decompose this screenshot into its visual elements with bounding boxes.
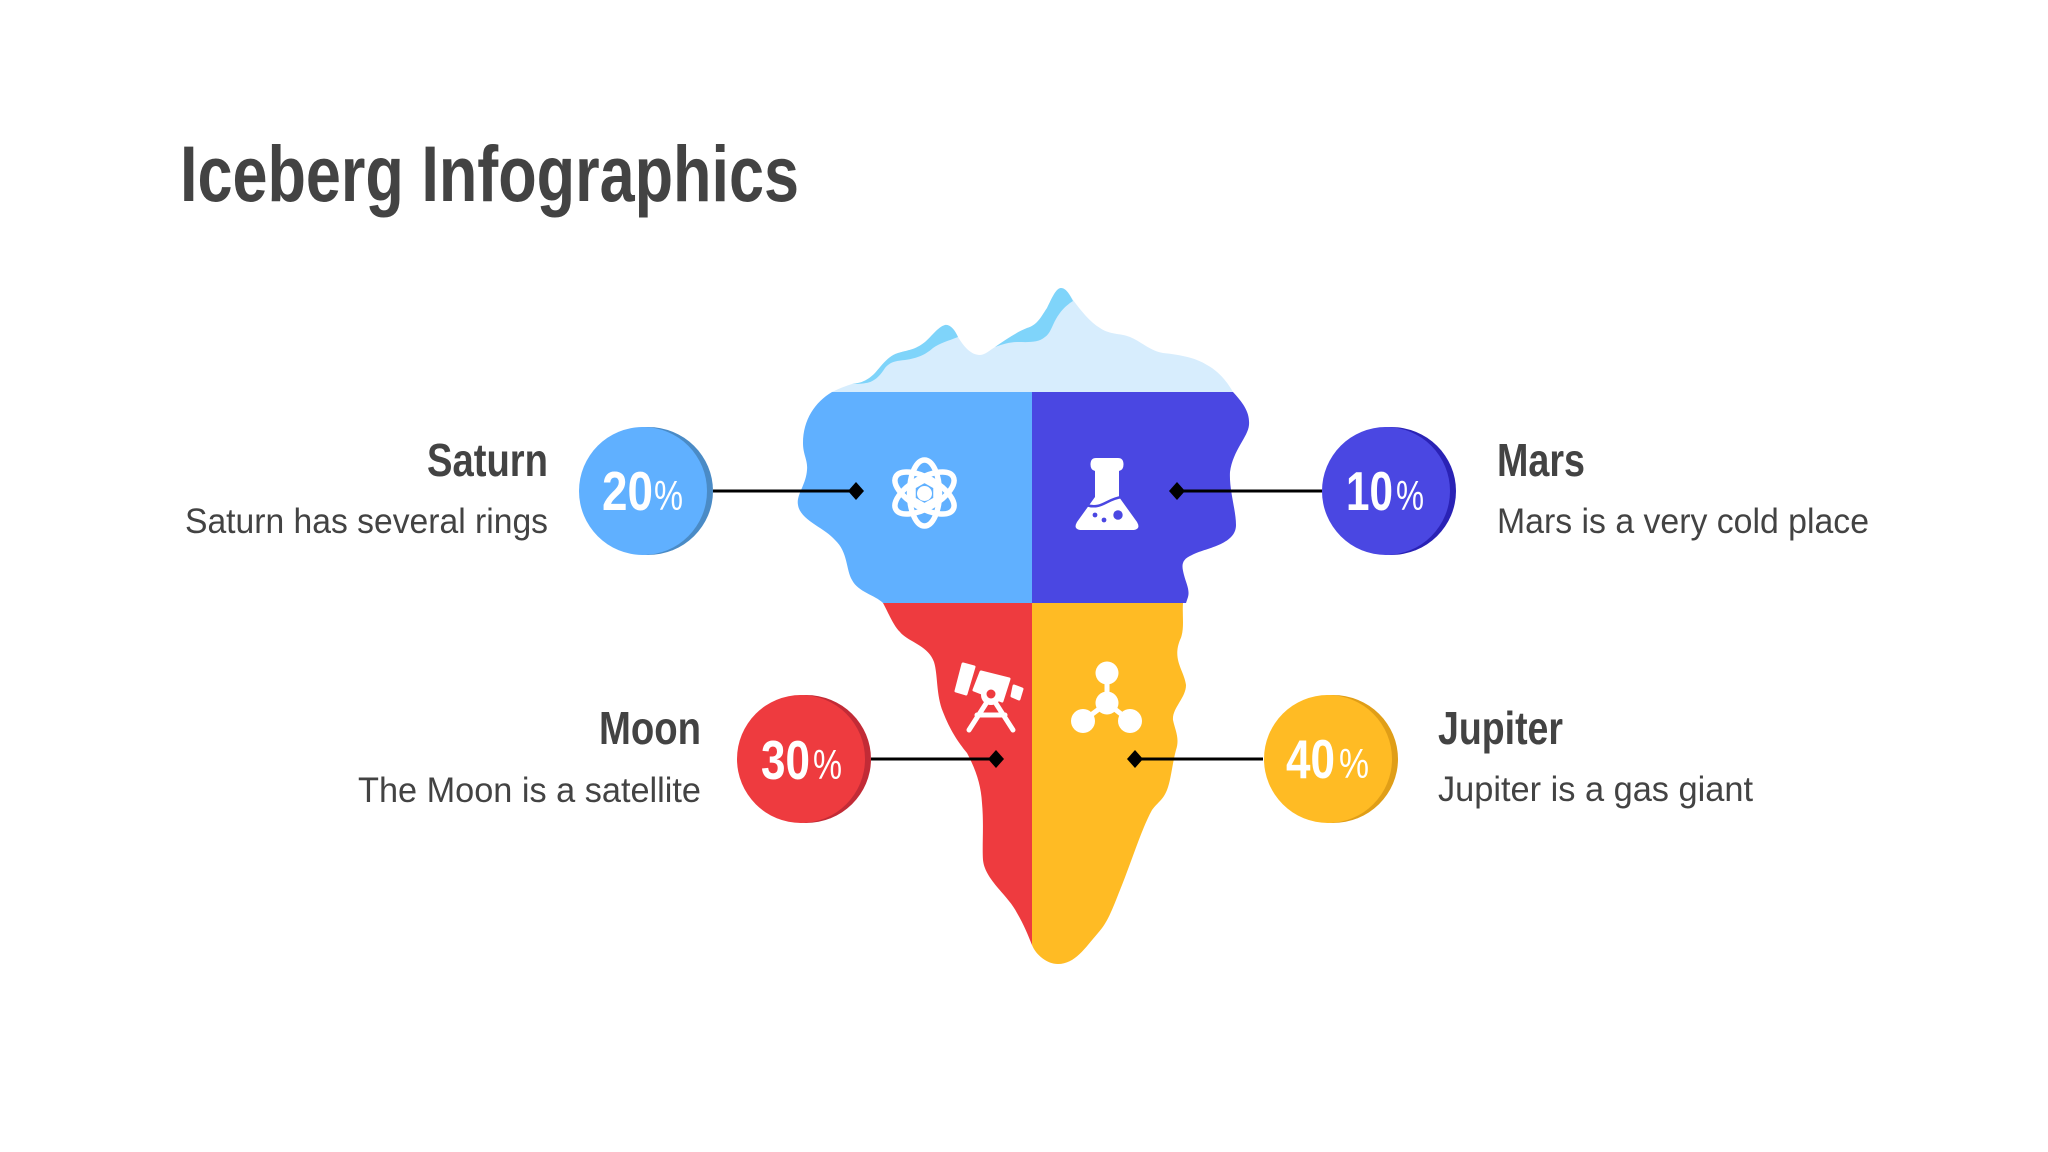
badge: Saturn 20%: 20 (602, 460, 653, 522)
text block: Jupiter: Jupiter is a gas giant (1438, 770, 1753, 809)
connector: Jupiter (1127, 750, 1263, 768)
badge: Mars 10%: % (1396, 472, 1424, 519)
segment: Mars (1032, 392, 1249, 603)
badge: Moon 30%: 30 (761, 729, 810, 791)
icon: atom (888, 460, 961, 526)
text block: Jupiter (1438, 702, 1753, 809)
text block: Saturn: Saturn (427, 434, 548, 486)
connector: Saturn (713, 482, 864, 500)
badge: Saturn 20%: % (654, 472, 683, 519)
text block: Mars (1497, 434, 1869, 541)
badge: Jupiter 40%: 40 (1286, 728, 1335, 790)
title: Iceberg Infographics (180, 129, 799, 218)
connector: Mars (1169, 482, 1322, 500)
icon: telescope (956, 664, 1022, 730)
text block: Saturn (185, 434, 548, 541)
segment: Jupiter (1032, 603, 1186, 964)
iceberg tip (832, 288, 1233, 392)
text block: Moon (358, 702, 701, 810)
snow shading right (995, 288, 1073, 347)
badge: Moon 30%: % (813, 741, 842, 788)
text block: Moon: Moon (599, 702, 701, 754)
iceberg (798, 288, 1249, 964)
badge: Jupiter 40%: % (1339, 740, 1369, 787)
badge: Jupiter 40% (1264, 695, 1398, 823)
text block: Moon: The Moon is a satellite (358, 771, 701, 810)
text block: Mars: Mars is a very cold place (1497, 502, 1869, 541)
badge: Mars 10% (1322, 427, 1456, 555)
connector: Moon (871, 750, 1004, 768)
snow shading left (852, 325, 958, 384)
text block: Jupiter: Jupiter (1438, 702, 1563, 754)
text block: Saturn: Saturn has several rings (185, 502, 548, 541)
segment: Moon (883, 603, 1032, 945)
segment: Saturn (798, 392, 1032, 603)
badge: Mars 10%: 10 (1346, 460, 1393, 522)
badge: Moon 30% (737, 695, 871, 823)
badge: Saturn 20% (579, 427, 713, 555)
text block: Mars: Mars (1497, 434, 1585, 486)
icon: flask (1076, 458, 1138, 530)
icon: molecule (1071, 662, 1142, 733)
